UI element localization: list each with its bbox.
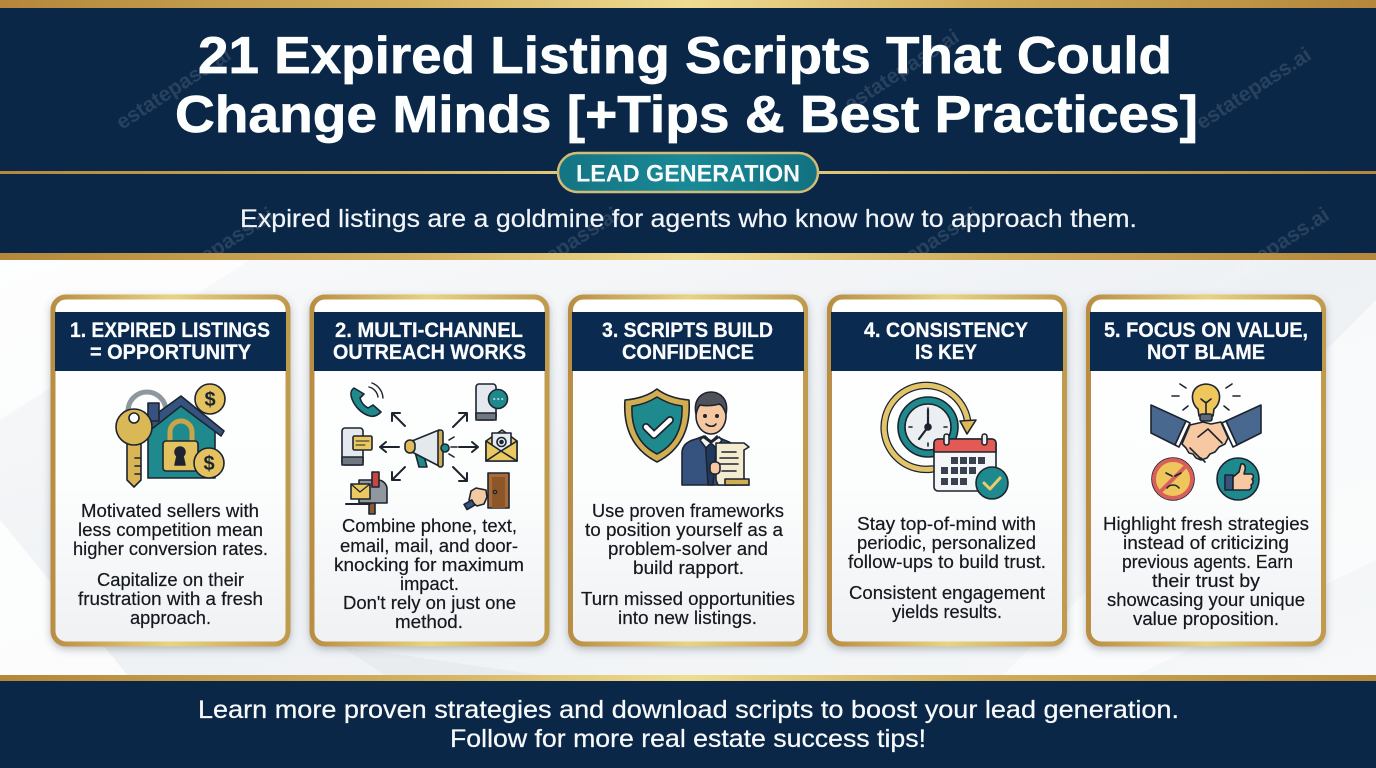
footer gold bar bbox=[0, 675, 1376, 681]
icon: smartphone message bbox=[342, 428, 372, 465]
light background panel bbox=[0, 258, 1376, 678]
panel: card 2 multi-channel outreach bbox=[312, 297, 547, 644]
icon: smartphone chat bbox=[476, 384, 508, 420]
icon: megaphone bbox=[405, 430, 457, 467]
icon: shield and agent with script bbox=[625, 389, 749, 485]
card 2 body text: knocking for maximum bbox=[334, 555, 524, 575]
card 1 body text: frustration with a fresh bbox=[78, 589, 263, 609]
card 5 heading bbox=[1090, 312, 1322, 371]
card 5 body text bbox=[1103, 514, 1309, 629]
card 3 body text: problem-solver and bbox=[608, 539, 768, 559]
icon: house key padlock coins: $ bbox=[203, 453, 215, 475]
card 2 heading: 2. MULTI-CHANNEL bbox=[335, 319, 523, 342]
card 3 body text: build rapport. bbox=[633, 558, 744, 578]
icon: clock and calendar bbox=[884, 385, 1008, 499]
category pill bbox=[558, 153, 818, 192]
card 3 body text: into new listings. bbox=[618, 608, 757, 628]
subtitle: Expired listings are a goldmine for agents who know how to approach them. bbox=[240, 205, 1137, 233]
card 3 heading: CONFIDENCE bbox=[622, 341, 754, 364]
watermarks: estatepass.ai bbox=[840, 25, 963, 116]
header bottom gold bar bbox=[0, 253, 1376, 260]
card 1 body text: Capitalize on their bbox=[97, 570, 244, 590]
card 1 heading: 1. EXPIRED LISTINGS bbox=[70, 319, 270, 342]
title: Change Minds [+Tips & Best Practices] bbox=[175, 86, 1198, 144]
card 3 body text: Turn missed opportunities bbox=[581, 589, 795, 609]
card 2 body text bbox=[334, 516, 524, 632]
card 1 body text: less competition mean bbox=[78, 520, 263, 540]
card 3 heading bbox=[572, 312, 804, 371]
card 5 body text: value proposition. bbox=[1133, 609, 1279, 629]
card 5 heading: 5. FOCUS ON VALUE, bbox=[1104, 319, 1308, 342]
card 5 heading: NOT BLAME bbox=[1147, 341, 1265, 364]
card 5 body text: previous agents. Earn bbox=[1122, 552, 1293, 572]
watermarks: estatepass.ai bbox=[1192, 43, 1315, 134]
card 5 body text: Highlight fresh strategies bbox=[1103, 514, 1309, 534]
footer text bbox=[198, 696, 1179, 753]
icon: handshake, bulb, no blame, thumbs up bbox=[1151, 384, 1261, 500]
icon: house key padlock coins bbox=[116, 384, 225, 487]
card 4 body text bbox=[848, 514, 1046, 622]
card 2 body text: impact. bbox=[400, 574, 459, 594]
panel: card 5 focus on value bbox=[1088, 297, 1324, 644]
card 3 body text bbox=[581, 501, 795, 628]
card 4 heading: 4. CONSISTENCY bbox=[864, 319, 1028, 342]
card 2 body text: Don't rely on just one bbox=[343, 593, 516, 613]
card 1 heading bbox=[55, 312, 286, 371]
card 4 heading bbox=[831, 312, 1063, 371]
watermarks: estatepass.ai bbox=[500, 203, 623, 294]
icon: phone call bbox=[351, 383, 383, 416]
watermarks: estatepass.ai bbox=[155, 203, 278, 294]
card 1 body text: higher conversion rates. bbox=[73, 539, 268, 559]
card 4 body text: periodic, personalized bbox=[857, 533, 1036, 553]
title: 21 Expired Listing Scripts That Could bbox=[198, 27, 1172, 85]
card 1 body text: Motivated sellers with bbox=[81, 501, 259, 521]
watermarks: estatepass.ai bbox=[112, 43, 235, 134]
card 2 body text: method. bbox=[395, 612, 463, 632]
card 4 body text: follow-ups to build trust. bbox=[848, 552, 1046, 572]
card 4 heading: IS KEY bbox=[915, 341, 977, 364]
watermarks: estatepass.ai bbox=[1210, 203, 1333, 294]
icon: house key padlock coins: $ bbox=[204, 389, 216, 411]
icon: envelope bbox=[486, 430, 517, 461]
card 2 body text: email, mail, and door- bbox=[340, 536, 518, 556]
card 5 body text: instead of criticizing bbox=[1123, 533, 1289, 553]
footer banner bbox=[0, 675, 1376, 768]
card 4 body text: Consistent engagement bbox=[849, 583, 1045, 603]
card 5 body text: their trust by bbox=[1152, 571, 1260, 591]
card 2 heading bbox=[314, 312, 545, 371]
title bbox=[175, 27, 1198, 144]
icon: mailbox bbox=[346, 472, 387, 514]
card 1 body text: approach. bbox=[130, 608, 211, 628]
card 3 body text: Use proven frameworks bbox=[592, 501, 784, 521]
card 3 heading: 3. SCRIPTS BUILD bbox=[602, 319, 773, 342]
card 3 body text: to position yourself as a bbox=[585, 520, 784, 540]
card 5 body text: showcasing your unique bbox=[1107, 590, 1305, 610]
footer text: Learn more proven strategies and download scripts to boost your lead generation. bbox=[198, 696, 1179, 724]
card 1 body text bbox=[73, 501, 268, 628]
arrows radiating from megaphone bbox=[380, 413, 478, 481]
card 2 heading: OUTREACH WORKS bbox=[333, 341, 526, 364]
card 4 body text: yields results. bbox=[892, 602, 1002, 622]
watermarks bbox=[112, 25, 1333, 294]
icon: door and knocking hand bbox=[464, 473, 509, 510]
category pill: LEAD GENERATION bbox=[576, 160, 800, 188]
panel: card 3 scripts build confidence bbox=[570, 297, 806, 644]
card 4 body text: Stay top-of-mind with bbox=[857, 514, 1036, 534]
top gold bar bbox=[0, 0, 1376, 8]
panel: card 4 consistency bbox=[830, 297, 1064, 644]
header banner bbox=[0, 0, 1376, 256]
gold divider line bbox=[0, 171, 1376, 174]
card 1 heading: = OPPORTUNITY bbox=[90, 341, 251, 364]
panel: card 1 expired listings bbox=[53, 297, 288, 644]
footer text: Follow for more real estate success tips! bbox=[450, 725, 926, 753]
watermarks: estatepass.ai bbox=[860, 203, 983, 294]
card 2 body text: Combine phone, text, bbox=[342, 516, 517, 536]
icon: outreach channels around megaphone bbox=[342, 383, 517, 514]
